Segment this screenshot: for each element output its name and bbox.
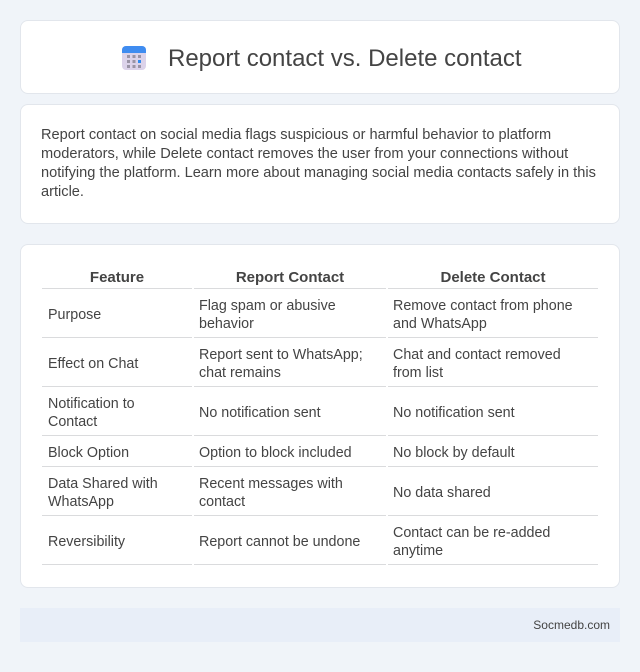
intro paragraph: notifying the platform. Learn more about managing social media contacts safely in this bbox=[41, 165, 596, 181]
table header bbox=[90, 269, 546, 286]
row: Block Option: Option to block included bbox=[199, 445, 352, 461]
intro paragraph: Report contact on social media flags suspicious or harmful behavior to platform bbox=[41, 127, 551, 143]
row: Data Shared with WhatsApp bbox=[48, 476, 491, 510]
row: Data Shared with WhatsApp: No data shared bbox=[393, 485, 491, 501]
row: Notification to Contact: Contact bbox=[48, 414, 97, 430]
row: Reversibility bbox=[48, 525, 550, 559]
row: Purpose bbox=[48, 298, 573, 332]
icon: calendar bbox=[122, 46, 146, 70]
row: Block Option bbox=[48, 445, 515, 461]
row: Notification to Contact: No notification sent bbox=[199, 405, 321, 421]
row: Reversibility: Contact can be re-added bbox=[393, 525, 550, 541]
row: Reversibility: Report cannot be undone bbox=[199, 534, 360, 550]
row: Purpose: and WhatsApp bbox=[393, 316, 487, 332]
footer source text: Socmedb.com bbox=[533, 618, 610, 632]
panel: header bbox=[20, 20, 620, 94]
footer bar bbox=[20, 608, 620, 642]
row: Notification to Contact: No notification sent bbox=[393, 405, 515, 421]
row: Data Shared with WhatsApp: contact bbox=[199, 494, 245, 510]
row: Purpose: Flag spam or abusive bbox=[199, 298, 336, 314]
row: Block Option: No block by default bbox=[393, 445, 515, 461]
row: Effect on Chat bbox=[48, 347, 561, 381]
table header: Delete Contact bbox=[440, 269, 546, 286]
row: Data Shared with WhatsApp: Data Shared with bbox=[48, 476, 158, 492]
row: Block Option: Block Option bbox=[48, 445, 129, 461]
row: Data Shared with WhatsApp: Recent messages with bbox=[199, 476, 343, 492]
intro paragraph: moderators, while Delete contact removes the user from your connections without bbox=[41, 146, 568, 162]
row: Notification to Contact: Notification to bbox=[48, 396, 135, 412]
panel: intro text bbox=[20, 104, 620, 224]
row: Reversibility: anytime bbox=[393, 543, 443, 559]
panel: comparison table bbox=[20, 244, 620, 588]
row: Effect on Chat: chat remains bbox=[199, 365, 281, 381]
row: Effect on Chat: Effect on Chat bbox=[48, 356, 138, 372]
row: Purpose: Purpose bbox=[48, 307, 101, 323]
row: Purpose: behavior bbox=[199, 316, 254, 332]
title: Report contact vs. Delete contact bbox=[168, 45, 522, 72]
row: Effect on Chat: from list bbox=[393, 365, 443, 381]
row: Data Shared with WhatsApp: WhatsApp bbox=[48, 494, 114, 510]
table header: Report Contact bbox=[236, 269, 344, 286]
row: Effect on Chat: Chat and contact removed bbox=[393, 347, 561, 363]
row: Reversibility: Reversibility bbox=[48, 534, 125, 550]
row: Purpose: Remove contact from phone bbox=[393, 298, 573, 314]
row: Notification to Contact bbox=[48, 396, 515, 430]
row: Effect on Chat: Report sent to WhatsApp; bbox=[199, 347, 363, 363]
intro paragraph bbox=[41, 127, 596, 200]
table header: Feature bbox=[90, 269, 144, 286]
intro paragraph: article. bbox=[41, 184, 84, 200]
